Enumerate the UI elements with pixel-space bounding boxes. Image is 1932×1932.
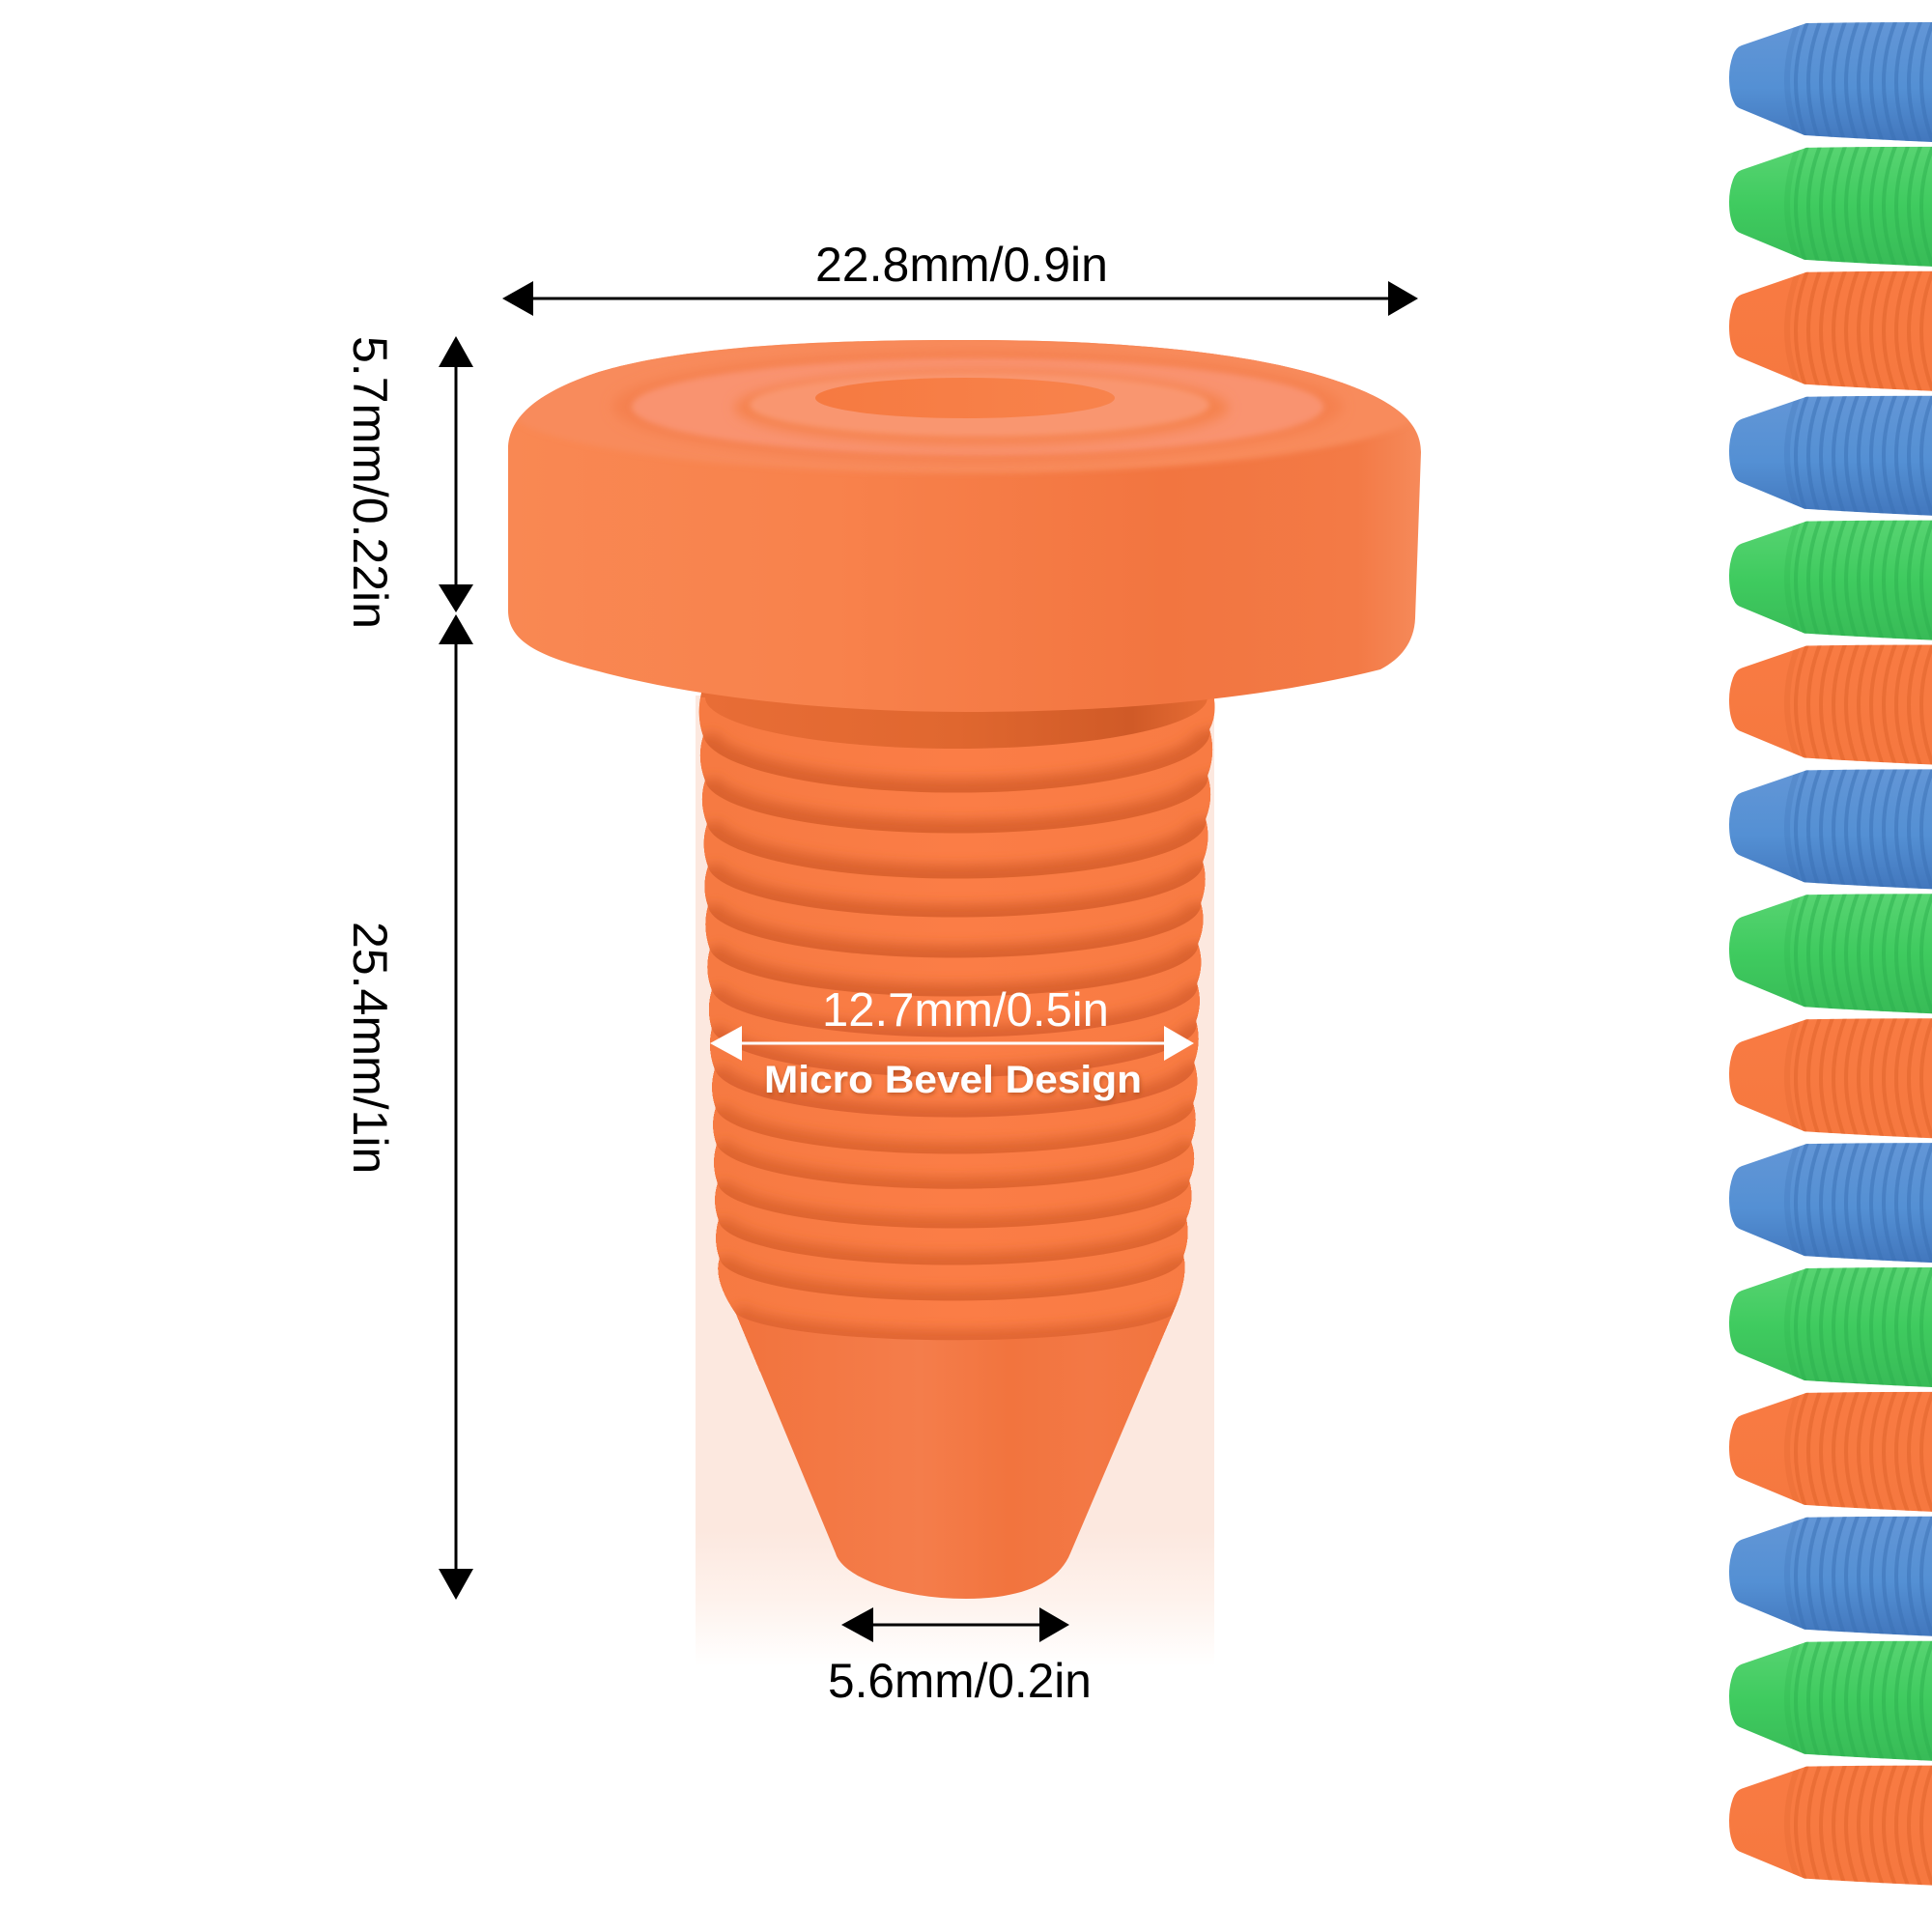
- tip: orange 1: [1729, 269, 1932, 394]
- tip: green 3: [1729, 891, 1932, 1016]
- tip: orange 5: [1729, 1763, 1932, 1889]
- tip: blue 1: [1729, 19, 1932, 145]
- tip: green 2: [1729, 518, 1932, 643]
- arrow: head height 5.7mm: [439, 336, 473, 612]
- label: 5.7mm/0.22in: 5.7mm/0.22in: [343, 336, 397, 629]
- label: 5.6mm/0.2in: 5.6mm/0.2in: [828, 1654, 1092, 1708]
- tip: blue 4: [1729, 1140, 1932, 1265]
- label: 22.8mm/0.9in: 22.8mm/0.9in: [815, 238, 1108, 292]
- tip: blue 2: [1729, 393, 1932, 519]
- tip: orange 2: [1729, 641, 1932, 767]
- side column of colored tips: [1729, 19, 1932, 1889]
- threaded screw body with cone tip: [699, 693, 1215, 1599]
- arrow: tip width 5.6mm: [841, 1607, 1069, 1642]
- label: 12.7mm/0.5in: 12.7mm/0.5in: [822, 984, 1109, 1037]
- tip: green 4: [1729, 1264, 1932, 1390]
- tip: blue 3: [1729, 766, 1932, 892]
- screw head disc: [504, 338, 1424, 712]
- highlight band behind screw body: [696, 696, 1214, 1666]
- label: Micro Bevel Design: Micro Bevel Design: [764, 1059, 1142, 1101]
- arrow: body length 25.4mm: [439, 614, 473, 1600]
- tip: green 5: [1729, 1638, 1932, 1764]
- tip: green 1: [1729, 144, 1932, 270]
- arrow: head width 22.8mm: [502, 281, 1418, 316]
- arrow: body width 12.7mm: [710, 1026, 1194, 1061]
- tip: orange 4: [1729, 1389, 1932, 1515]
- tip: orange 3: [1729, 1015, 1932, 1141]
- tip: blue 5: [1729, 1514, 1932, 1639]
- label: 25.4mm/1in: 25.4mm/1in: [343, 922, 397, 1174]
